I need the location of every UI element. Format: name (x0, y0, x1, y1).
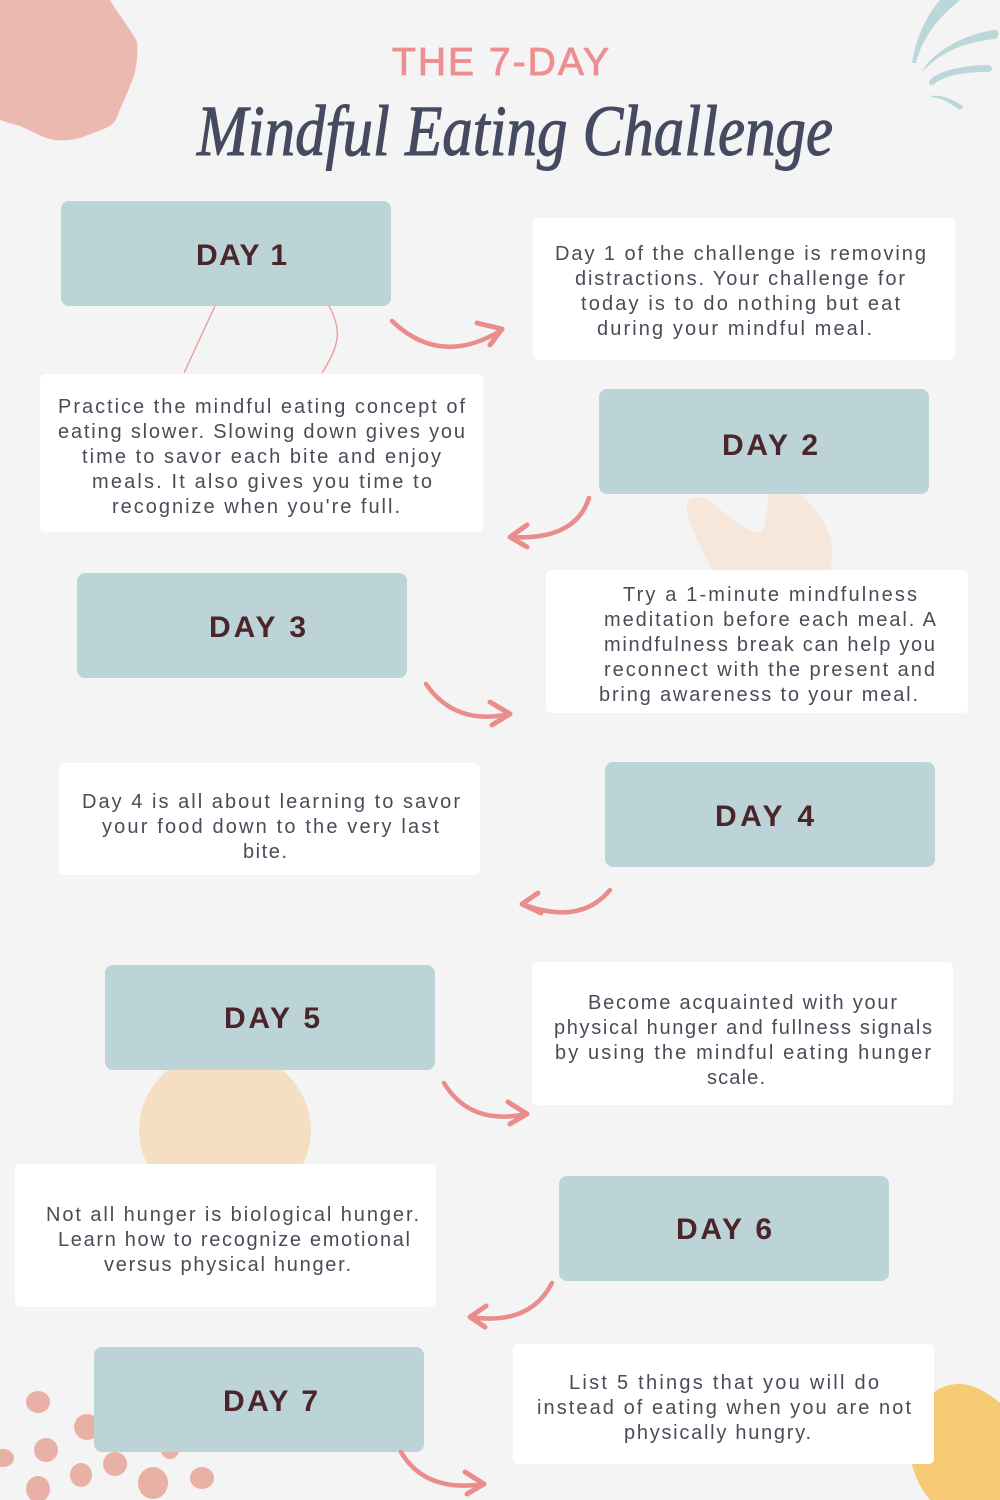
panel: day 5 description: Become acquainted with your (588, 992, 897, 1014)
decoration: pink blob top left (0, 0, 137, 140)
panel: day 4 description (59, 763, 480, 875)
panel: day 6 description (15, 1164, 436, 1307)
panel: day 3 description: reconnect with the present and (604, 659, 935, 681)
panel: day 1 label (61, 201, 391, 306)
panel: day 4 description: Day 4 is all about learning to savor (82, 791, 460, 813)
panel: day 6 description: Learn how to recognize emotional (58, 1229, 410, 1251)
decoration: peach blob behind day 2 (687, 494, 832, 575)
arrow: day 3 (426, 684, 510, 725)
panel: day 5 label (105, 965, 435, 1070)
panel: day 7 label (94, 1347, 424, 1452)
panel: day 1 description: distractions. Your challenge for (575, 268, 905, 290)
panel: day 2 label: DAY 2 (722, 429, 818, 462)
panel: day 3 description: mindfulness break can help you (604, 634, 935, 656)
arrow: day 6 (470, 1283, 552, 1327)
arrow: day 2 (510, 498, 589, 547)
heading: the 7-day: THE 7-DAY (392, 41, 609, 84)
arrow: day 7 (401, 1452, 484, 1494)
decoration: yellow blob bottom right (912, 1384, 1000, 1500)
panel: day 1 description: during your mindful meal. (597, 318, 872, 340)
panel: day 4 description: bite. (243, 841, 287, 863)
panel: day 6 description: versus physical hunger. (104, 1254, 351, 1276)
panel: day 4 label (605, 762, 935, 867)
decoration: thin lines under day 1 (184, 306, 337, 373)
panel: day 1 description: Day 1 of the challenge is removing (555, 243, 926, 265)
panel: day 3 description: Try a 1-minute mindfulness (623, 584, 917, 606)
panel: day 1 description (533, 218, 955, 360)
panel: day 5 description: scale. (707, 1067, 765, 1089)
panel: day 2 description: Practice the mindful eating concept of (58, 396, 465, 418)
panel: day 4 label: DAY 4 (715, 800, 814, 833)
decoration: teal brush strokes top right (912, 0, 999, 109)
panel: day 2 description: eating slower. Slowing down gives you (58, 421, 465, 443)
panel: day 4 description: your food down to the very last (102, 816, 439, 838)
panel: day 7 description (513, 1344, 934, 1464)
panel: day 5 description (532, 962, 953, 1105)
panel: day 6 label (559, 1176, 889, 1281)
panel: day 6 label: DAY 6 (676, 1213, 772, 1246)
panel: day 3 description (546, 570, 968, 713)
panel: day 7 description: List 5 things that you will do (569, 1372, 879, 1394)
panel: day 3 description: meditation before each meal. A (604, 609, 937, 631)
panel: day 2 description: time to savor each bite and enjoy (82, 446, 441, 468)
panel: day 3 label: DAY 3 (209, 611, 306, 644)
panel: day 5 label: DAY 5 (224, 1002, 320, 1035)
title: Mindful Eating Challenge (196, 91, 833, 171)
panel: day 7 description: instead of eating when you are not (537, 1397, 911, 1419)
panel: day 7 description: physically hungry. (624, 1422, 811, 1444)
panel: day 6 description: Not all hunger is biological hunger. (46, 1204, 419, 1226)
panel: day 2 label (599, 389, 929, 494)
panel: day 2 description (40, 374, 483, 532)
panel: day 2 description: meals. It also gives you time to (92, 471, 432, 493)
decoration: tan circle behind day 5 (139, 1050, 311, 1210)
arrow: day 4 (522, 890, 610, 913)
panel: day 3 label (77, 573, 407, 678)
panel: day 1 label: DAY 1 (196, 239, 287, 272)
panel: day 5 description: physical hunger and fullness signals (554, 1017, 932, 1039)
decoration: pink dots bottom left (0, 1391, 214, 1500)
panel: day 1 description: today is to do nothing but eat (581, 293, 900, 315)
panel: day 3 description: bring awareness to your meal. (599, 684, 918, 706)
arrow: day 1 (392, 321, 502, 347)
arrow: day 5 (444, 1083, 527, 1124)
panel: day 2 description: recognize when you're full. (112, 496, 400, 518)
panel: day 5 description: by using the mindful eating hunger (555, 1042, 931, 1064)
panel: day 7 label: DAY 7 (223, 1385, 318, 1418)
